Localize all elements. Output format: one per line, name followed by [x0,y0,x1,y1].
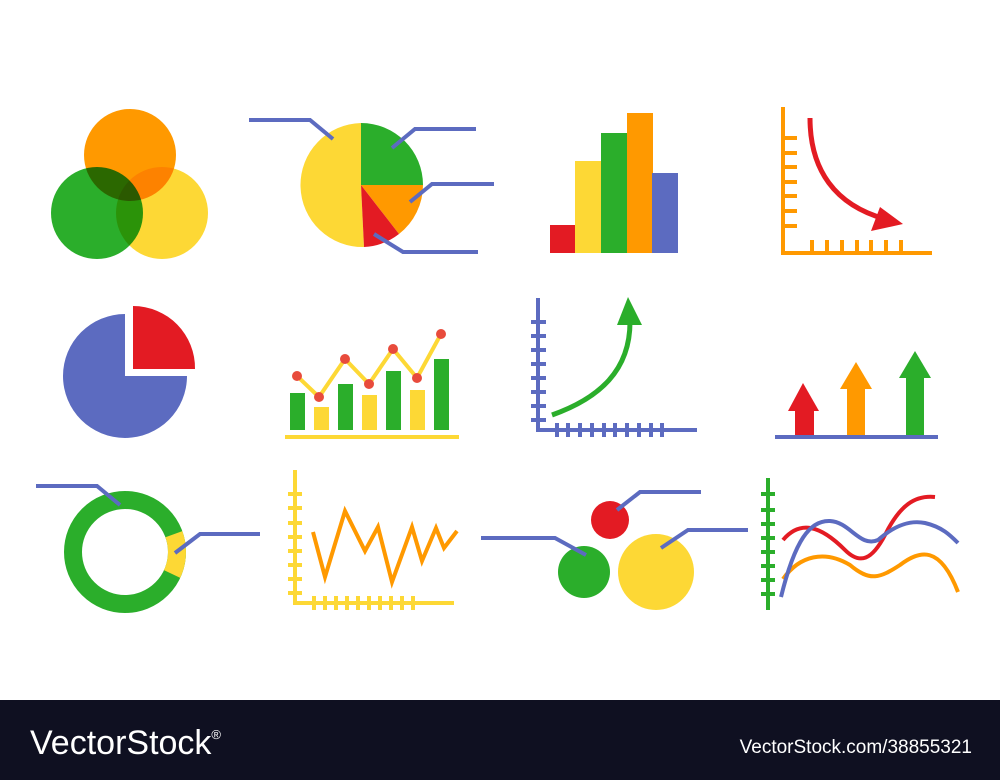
footer logo text: VectorStock [30,724,211,762]
icon: zigzag line chart [288,470,457,610]
icon: bar and line chart [285,329,459,439]
footer logo text: ® [211,727,221,742]
icon: wavy lines chart [761,478,958,610]
icon: donut chart [36,486,260,604]
footer bar [0,700,1000,780]
icon: decreasing chart [783,107,932,253]
icon: bubble chart [481,492,748,610]
icon: rising arrows [775,351,938,439]
icon: pie with exploded slice [63,306,195,438]
icon: venn diagram [51,109,208,259]
footer image id: VectorStock.com/38855321 [740,737,972,758]
icon: pie chart with leaders [249,120,494,252]
icon: bar chart [550,113,678,253]
icon: growth curve chart [531,297,697,437]
